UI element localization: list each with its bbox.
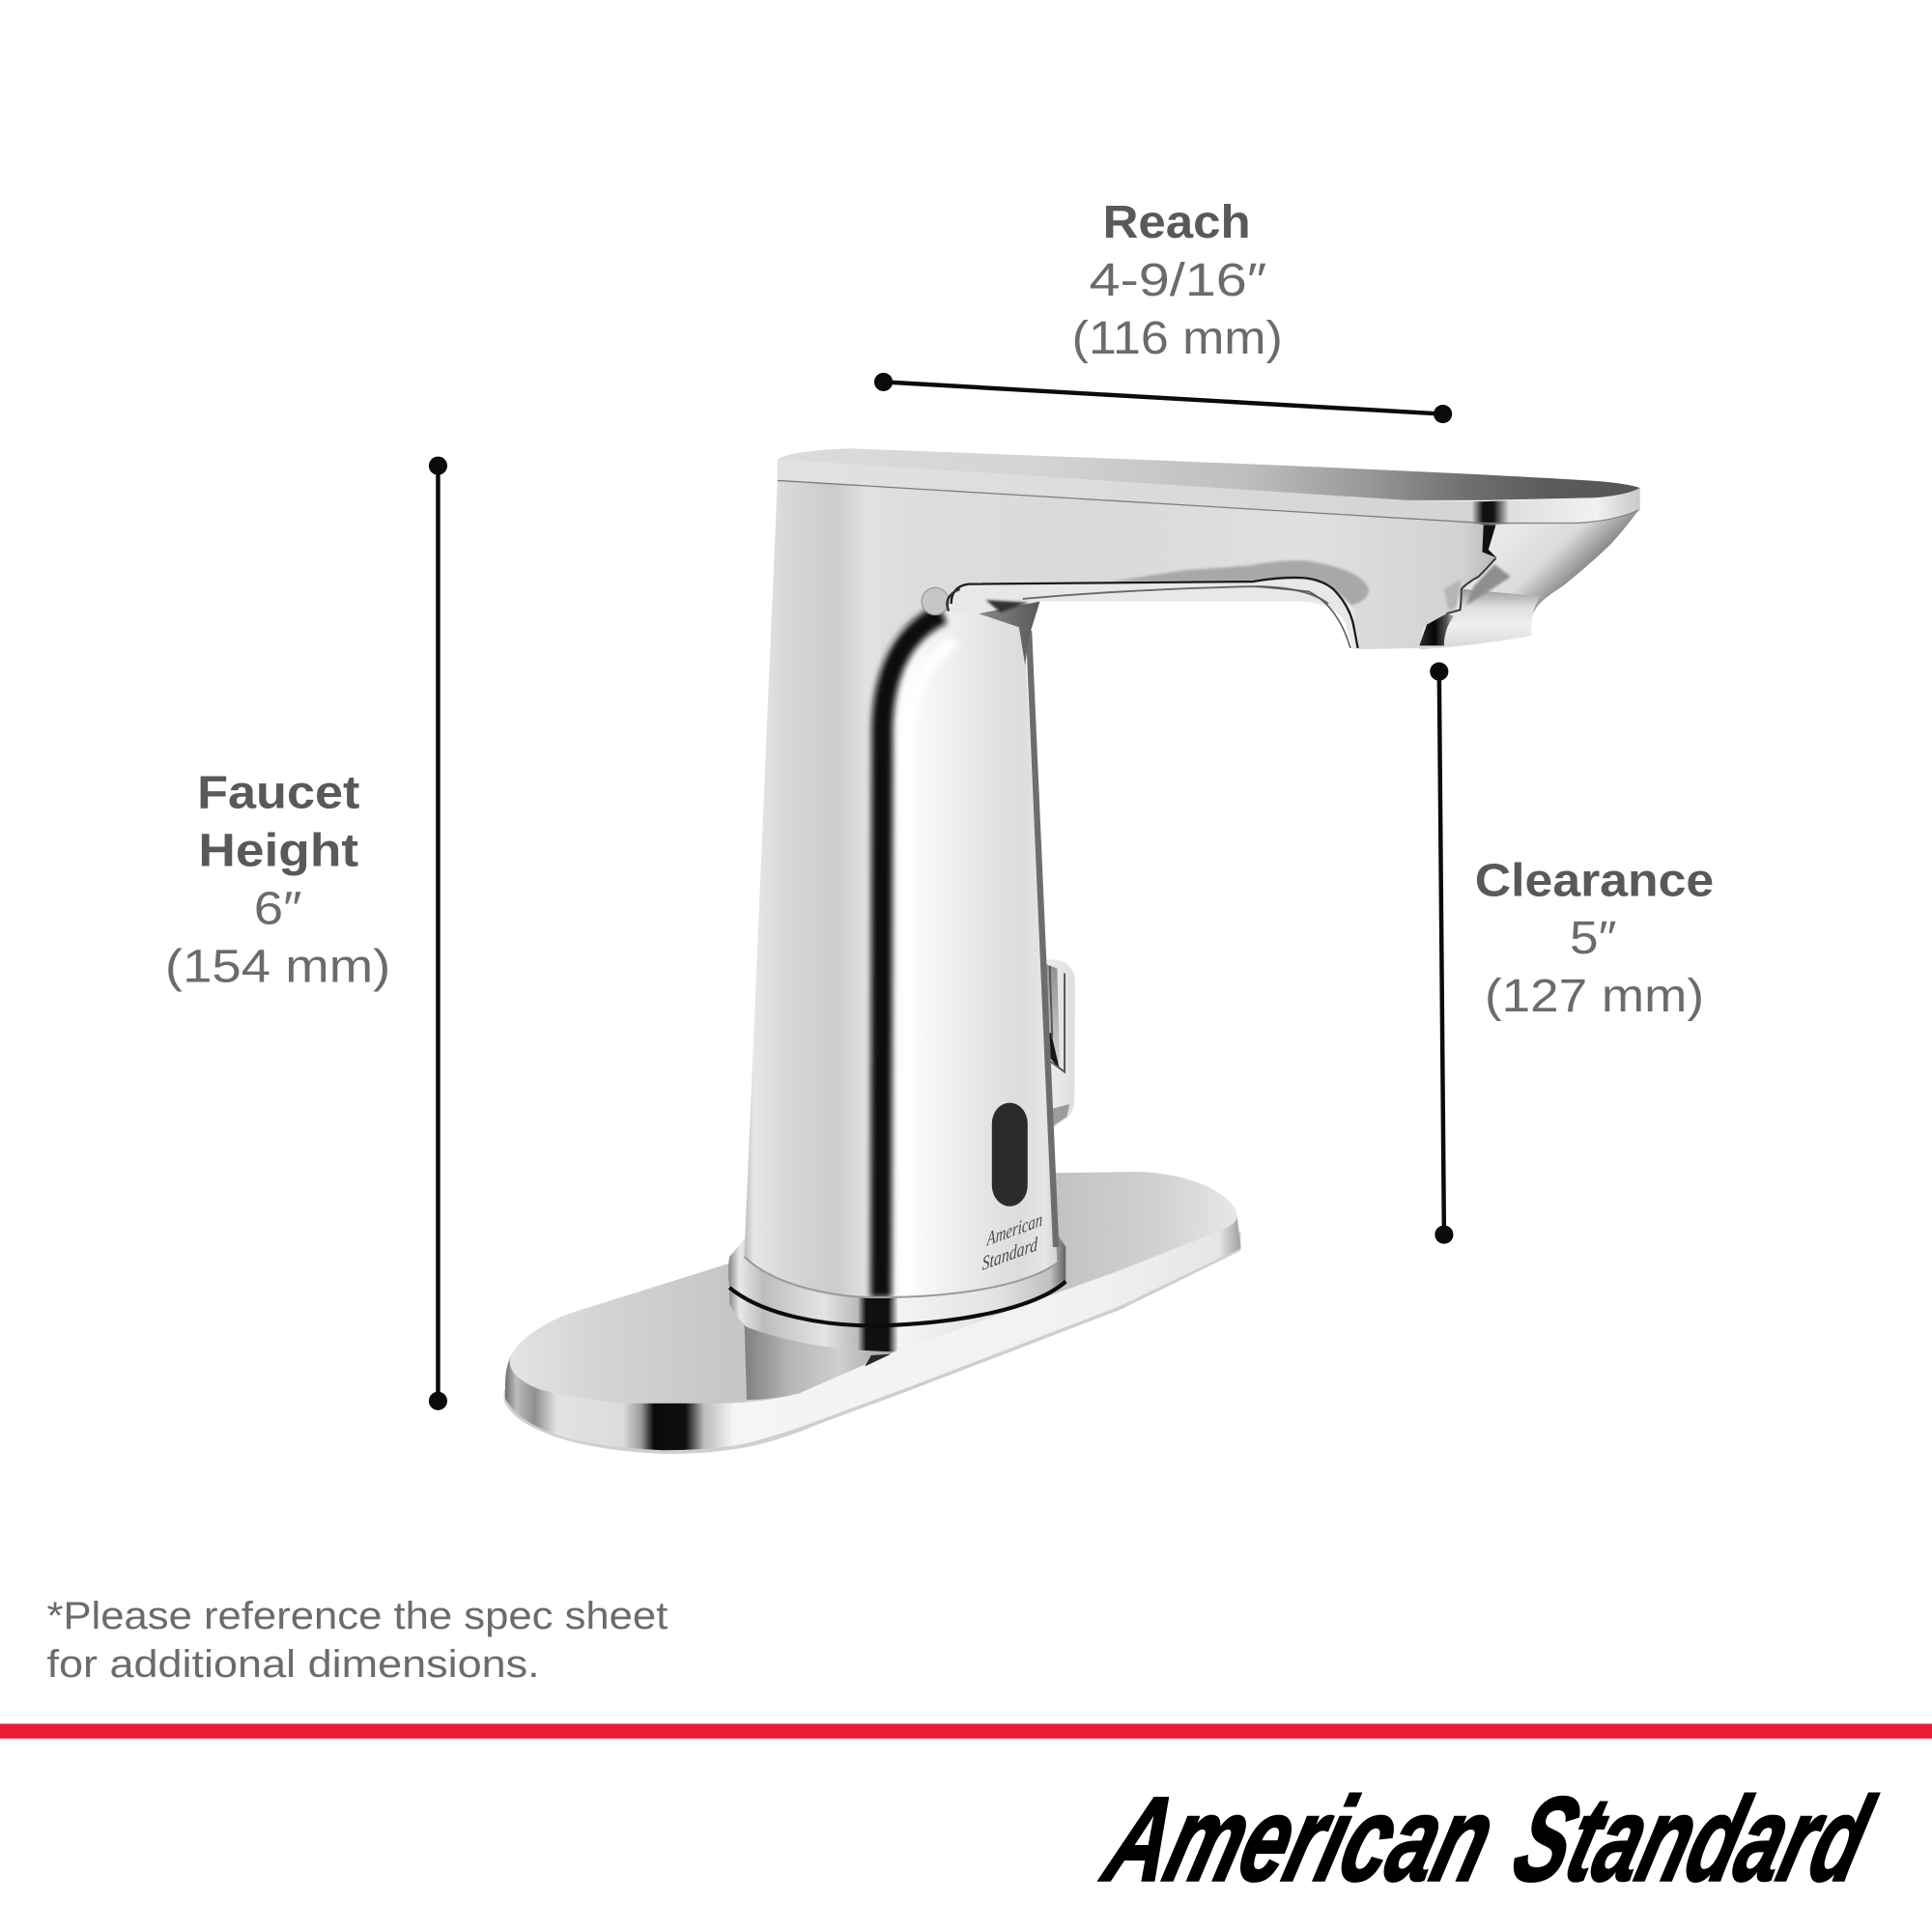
faucet brand mark	[982, 1208, 1042, 1275]
label: faucet height dimension: 6″	[254, 883, 302, 935]
body right edge shade	[1029, 631, 1056, 1247]
wedge shadow under neck	[979, 601, 1040, 666]
footnote: *Please reference the spec sheet	[46, 1595, 668, 1637]
body base seam	[744, 1257, 1057, 1297]
label: clearance dimension: Clearance	[1475, 854, 1714, 906]
brand logo: American	[1091, 1773, 1508, 1906]
nozzle crease	[1419, 525, 1511, 645]
seam line	[778, 480, 1638, 523]
spout nozzle lower lip	[1419, 589, 1540, 649]
footnote	[46, 1595, 668, 1686]
spout nozzle upper flare	[1454, 510, 1638, 616]
spout neck chrome	[922, 578, 1359, 649]
deck plate lower lip	[504, 1233, 1240, 1454]
faucet brand mark: Standard	[982, 1234, 1037, 1275]
faucet brand mark: American	[985, 1208, 1042, 1251]
label: faucet height dimension: Faucet	[197, 767, 359, 819]
inner column	[877, 610, 1057, 1297]
soft highlight next to band	[907, 640, 955, 1293]
label: faucet height dimension	[165, 767, 390, 993]
faucet body outer shell	[744, 479, 985, 1297]
footnote: for additional dimensions.	[46, 1643, 540, 1686]
faucet illustration	[504, 448, 1640, 1454]
arrow: clearance dimension line	[1430, 663, 1453, 1244]
faucet handle at rear	[1037, 958, 1075, 1135]
reflection dark glint	[865, 1354, 891, 1367]
lower collar ring	[729, 1282, 1065, 1351]
gray reflection on spout	[1112, 560, 1369, 605]
label: reach dimension: 4-9/16″	[1090, 254, 1266, 306]
upper collar ring	[728, 1233, 1065, 1325]
label: faucet height dimension: Height	[198, 825, 358, 877]
red divider bar	[0, 1723, 1932, 1739]
label: faucet height dimension: (154 mm)	[165, 941, 390, 993]
arrow: faucet height dimension line	[429, 457, 447, 1410]
motion sensor window	[992, 1103, 1028, 1207]
deck plate top surface	[510, 1172, 1237, 1404]
label: clearance dimension: 5″	[1570, 912, 1616, 964]
dark reflection band	[881, 613, 943, 1297]
deck plate outer edge	[505, 1172, 1240, 1450]
spout arm front face	[881, 486, 1495, 702]
neck knob	[922, 587, 949, 614]
label: reach dimension: Reach	[1103, 196, 1251, 248]
label: reach dimension	[1072, 196, 1283, 364]
arrow: reach dimension line	[874, 373, 1452, 423]
spout rim band	[778, 460, 1640, 525]
base reflection on plate	[744, 1319, 895, 1400]
label: clearance dimension	[1475, 854, 1714, 1022]
label: clearance dimension: (127 mm)	[1485, 970, 1704, 1022]
collar black groove	[729, 1282, 1065, 1325]
label: reach dimension: (116 mm)	[1072, 312, 1283, 364]
spout top surface	[778, 448, 1640, 500]
